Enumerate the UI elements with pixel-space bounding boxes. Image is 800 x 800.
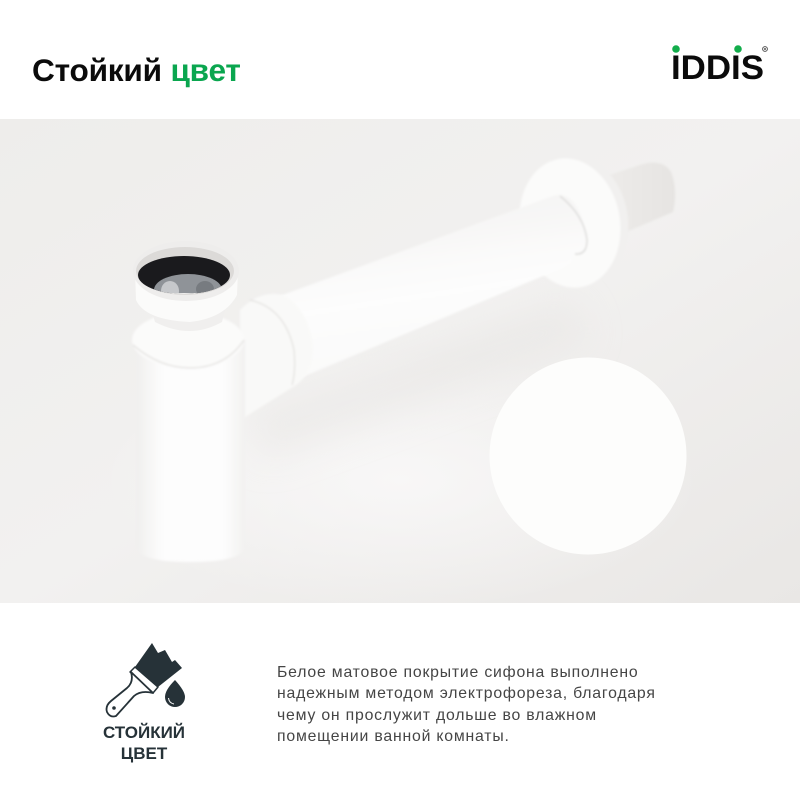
description text <box>277 664 656 745</box>
siphon horizontal tube <box>255 195 587 378</box>
title: Стойкий цвет <box>32 52 241 88</box>
product photo panel <box>0 119 800 603</box>
siphon elbow joint <box>240 294 313 420</box>
description text: Белое матовое покрытие сифона выполнено <box>277 664 638 681</box>
icon label: СТОЙКИЙ <box>103 723 185 742</box>
description text: надежным методом электрофореза, благодаря <box>277 685 656 702</box>
icon label: ЦВЕТ <box>121 744 167 763</box>
icon: paint brush with drop <box>106 643 185 718</box>
siphon wall pipe stub <box>606 163 675 232</box>
siphon shadow <box>250 300 590 460</box>
siphon neck and threaded cap <box>136 247 238 331</box>
siphon vertical body <box>132 312 245 562</box>
description text: помещении ванной комнаты. <box>277 728 510 745</box>
colour swatch circle <box>490 358 686 554</box>
siphon wall flange <box>509 146 639 296</box>
description text: чему он прослужит дольше во влажном <box>277 707 597 724</box>
icon label <box>103 722 185 763</box>
